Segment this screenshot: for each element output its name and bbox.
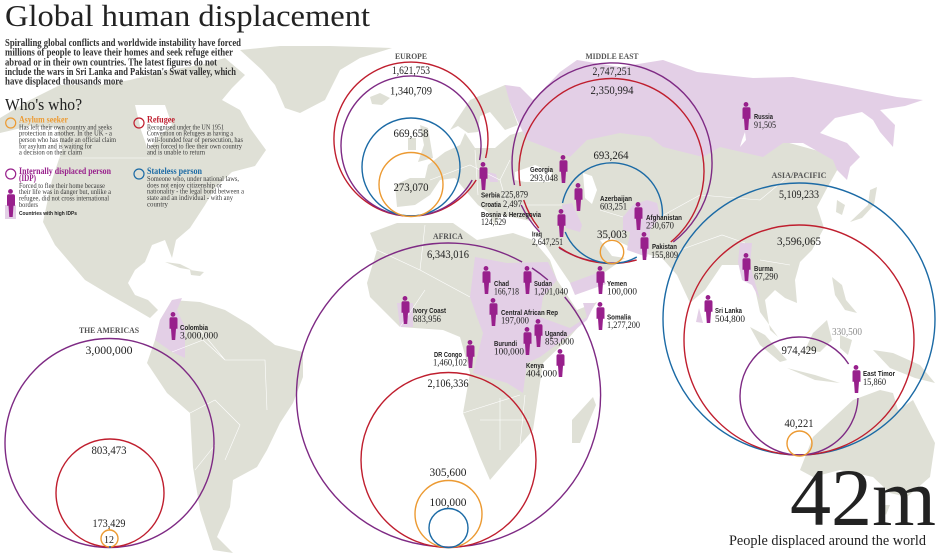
country: central african republic: 197,000	[501, 316, 529, 326]
legend: internally displaced person: refugee, did not cross international	[19, 194, 109, 203]
circles: asia pacific: 330,500	[832, 327, 862, 338]
country: serbia croatia bosnia: Serbia	[481, 192, 500, 200]
country: azerbaijan: 603,251	[600, 202, 627, 212]
circles: the americas: 173,429	[92, 516, 126, 530]
land: burma	[738, 243, 760, 300]
land: ivory coast	[397, 303, 413, 327]
circles: africa	[297, 232, 601, 548]
circles: europe	[334, 52, 488, 216]
circles: asia pacific: 974,429	[782, 343, 816, 357]
country: serbia croatia bosnia: Bosnia & Herzegovia	[481, 212, 541, 219]
circles: asia pacific	[663, 171, 935, 456]
country: kenya: Kenya	[526, 363, 544, 370]
land: southeast asia islands	[750, 277, 935, 383]
legend: internally displaced person: Countries with high IDPs	[19, 211, 77, 217]
circles: the americas: 803,473	[92, 443, 126, 457]
country: yemen: Yemen	[607, 281, 627, 288]
country: yemen: 100,000	[607, 286, 637, 298]
land: africa	[367, 223, 597, 480]
circles: asia pacific: 5,109,233	[779, 187, 819, 201]
country: sudan	[524, 266, 568, 298]
country: east timor: East Timor	[863, 371, 895, 378]
country: burma	[742, 253, 778, 282]
circles: the americas: 3,000,000	[86, 343, 132, 357]
legend: internally displaced person: (IDP)	[19, 173, 36, 183]
circles: asia pacific: 3,596,065	[777, 234, 821, 248]
country: kenya: 404,000	[526, 368, 557, 380]
legend: stateless person: nationality - the legal bond between a	[147, 187, 245, 196]
country: pakistan	[640, 232, 678, 261]
legend: asylum seeker: a decision on their claim	[19, 148, 82, 157]
circles: europe: 1,621,753	[392, 63, 430, 77]
country: russia	[742, 102, 776, 131]
legend: asylum seeker	[6, 114, 116, 157]
country: serbia croatia bosnia: 2,497	[503, 199, 522, 210]
country: serbia croatia bosnia	[480, 162, 541, 228]
land: caribbean	[165, 262, 204, 276]
land: hudson bay	[135, 105, 172, 150]
country: sudan: 1,201,040	[534, 286, 568, 298]
legend: stateless person: Stateless person	[147, 166, 202, 176]
country: dr congo	[433, 340, 474, 368]
big number caption: People displaced around the world	[729, 533, 926, 549]
legend: refugee	[134, 114, 243, 157]
country: colombia: Colombia	[180, 325, 208, 332]
intro text: Spiralling global conflicts and worldwide instability have forced	[5, 38, 241, 49]
circles: europe: 669,658	[394, 126, 428, 140]
country: russia: 91,505	[754, 120, 776, 131]
intro text: abroad or in their own countries. The latest figures do not	[5, 57, 218, 68]
circles: the americas: THE AMERICAS	[79, 326, 139, 335]
legend: stateless person: country	[147, 199, 168, 208]
land: russia	[505, 60, 923, 180]
country: azerbaijan: Azerbaijan	[600, 196, 632, 203]
legend: refugee: been forced to flee their own country	[147, 141, 242, 150]
legend: stateless person: does not enjoy citizenship or	[147, 180, 222, 189]
land: eurasia	[395, 125, 840, 337]
legend: internally displaced person: borders	[19, 200, 38, 209]
circles: asia pacific: ASIA/PACIFIC	[772, 171, 826, 180]
circles: middle east: MIDDLE EAST	[586, 52, 639, 61]
circles: europe: 273,070	[394, 180, 428, 194]
country: iraq	[532, 209, 566, 248]
circles: africa: 6,343,016	[427, 247, 469, 261]
country: iraq: Iraq	[532, 232, 542, 238]
country: azerbaijan	[574, 183, 632, 212]
country: sri lanka	[704, 295, 745, 325]
circles: europe: 1,340,709	[390, 84, 432, 98]
legend: stateless person: Someone who, under national laws,	[147, 174, 239, 183]
country: pakistan: 155,809	[651, 250, 678, 261]
country: sudan: Sudan	[534, 281, 552, 288]
land: central east africa high idp countries	[470, 257, 595, 393]
country: dr congo: DR Congo	[434, 352, 462, 359]
circles: middle east: 2,747,251	[592, 64, 632, 78]
land: lake baikal	[740, 132, 746, 147]
legend: asylum seeker: for asylum and is waiting for	[19, 141, 92, 150]
legend: internally displaced person: their life was in danger but, unlike a	[19, 187, 112, 196]
country: central african republic	[490, 298, 558, 326]
legend: stateless person	[134, 166, 245, 208]
circles: middle east: 693,264	[594, 148, 628, 162]
land: serbia	[488, 172, 498, 182]
land: afghanistan pakistan	[623, 200, 660, 257]
intro text: include the wars in Sri Lanka and Pakistan's Swat valley, which	[5, 67, 236, 78]
country: ivory coast: 683,956	[413, 314, 441, 325]
land: seas	[515, 165, 597, 204]
land: australia	[800, 390, 935, 515]
circles: europe: EUROPE	[395, 52, 427, 61]
country: serbia croatia bosnia: 225,879	[501, 190, 528, 200]
circles: the americas: 12	[104, 535, 114, 546]
country: burundi	[494, 327, 532, 358]
land: north america	[0, 58, 266, 318]
intro text: have displaced thousands more	[5, 77, 123, 88]
legend: asylum seeker: person who has made an official claim	[19, 135, 116, 144]
country: uganda: 853,000	[545, 336, 574, 348]
country: east timor: 15,860	[863, 377, 886, 388]
country: dr congo: 1,460,102	[433, 358, 467, 368]
country: russia: Russia	[754, 114, 773, 121]
country: yemen	[596, 266, 637, 298]
land: iraq	[562, 203, 582, 232]
country: serbia croatia bosnia: 124,529	[481, 217, 506, 228]
legend: asylum seeker: protection in another. In the UK - a	[19, 129, 113, 138]
who's who heading: Who's who?	[5, 95, 82, 114]
country: burundi: Burundi	[494, 341, 517, 348]
land: iceland uk ireland	[370, 93, 433, 162]
land: colombia	[155, 298, 185, 358]
country: sri lanka: Sri Lanka	[715, 308, 742, 315]
legend: asylum seeker: Asylum seeker	[19, 114, 68, 124]
country: kenya	[526, 349, 564, 380]
country: burma: 67,290	[754, 272, 778, 282]
country: colombia	[170, 312, 218, 342]
country: colombia: 3,000,000	[180, 330, 218, 342]
legend: stateless person: state and an individual - with any	[147, 193, 233, 202]
country: uganda: Uganda	[545, 331, 567, 338]
legend: internally displaced person: Internally displaced person	[19, 166, 111, 176]
land: greenland	[240, 46, 392, 113]
legend: internally displaced person: Forced to flee their home because	[19, 181, 106, 190]
land: scandinavia	[450, 85, 520, 133]
circles: middle east: 35,003	[597, 227, 627, 241]
country: burma: Burma	[754, 266, 773, 273]
circles: africa: 2,106,336	[428, 376, 468, 390]
country: somalia	[596, 302, 640, 331]
land: south america	[147, 300, 303, 553]
country: afghanistan: 230,670	[646, 220, 674, 232]
country: afghanistan: Afghanistan	[646, 215, 682, 222]
country: uganda	[534, 319, 574, 348]
country: georgia	[530, 155, 568, 184]
circles: asia pacific: 40,221	[784, 416, 814, 430]
legend: refugee: Refugee	[147, 114, 175, 124]
circles: africa: 100,000	[430, 495, 466, 509]
legend: asylum seeker: Has left their own country and seeks	[19, 122, 112, 131]
country: chad: 166,718	[494, 286, 519, 298]
country: east timor	[852, 365, 895, 393]
land: japan korea	[836, 187, 877, 222]
country: serbia croatia bosnia: Croatia	[481, 202, 501, 209]
country: ivory coast: Ivory Coast	[413, 308, 447, 315]
land: yemen	[570, 272, 606, 295]
circles: the americas	[5, 326, 214, 548]
intro text: millions of people to leave their homes and seek refuge either	[5, 48, 233, 59]
country: chad	[482, 266, 519, 298]
legend: internally displaced person	[5, 166, 112, 219]
country: afghanistan	[634, 202, 682, 232]
country: iraq: 2,647,251	[532, 237, 563, 248]
country: pakistan: Pakistan	[652, 244, 677, 251]
country: georgia: 293,048	[530, 173, 558, 184]
circles: middle east: 2,350,994	[590, 83, 634, 97]
country: central african republic: Central African Rep	[501, 310, 558, 317]
country: sri lanka: 504,800	[715, 314, 745, 325]
country: somalia: 1,277,200	[607, 320, 640, 331]
legend: refugee: well-founded fear of persecution, has	[147, 135, 243, 144]
land: sri lanka	[696, 308, 703, 323]
circles: middle east	[512, 52, 712, 264]
country: burundi: 100,000	[494, 346, 524, 358]
country: ivory coast	[402, 296, 447, 325]
circles: africa: 305,600	[430, 465, 466, 479]
country borders	[50, 150, 790, 470]
legend: refugee: and is unable to return	[147, 148, 205, 157]
country: georgia: Georgia	[530, 167, 553, 174]
intro text	[5, 38, 241, 88]
country: somalia: Somalia	[607, 314, 631, 322]
legend: refugee: Recognised under the UN 1951	[147, 122, 224, 131]
legend: refugee: Convention on Refugees as having a	[147, 129, 234, 138]
circles: africa: AFRICA	[433, 232, 463, 241]
country: chad: Chad	[494, 281, 509, 288]
land: madagascar	[572, 397, 596, 443]
big number: 42m	[790, 452, 936, 543]
